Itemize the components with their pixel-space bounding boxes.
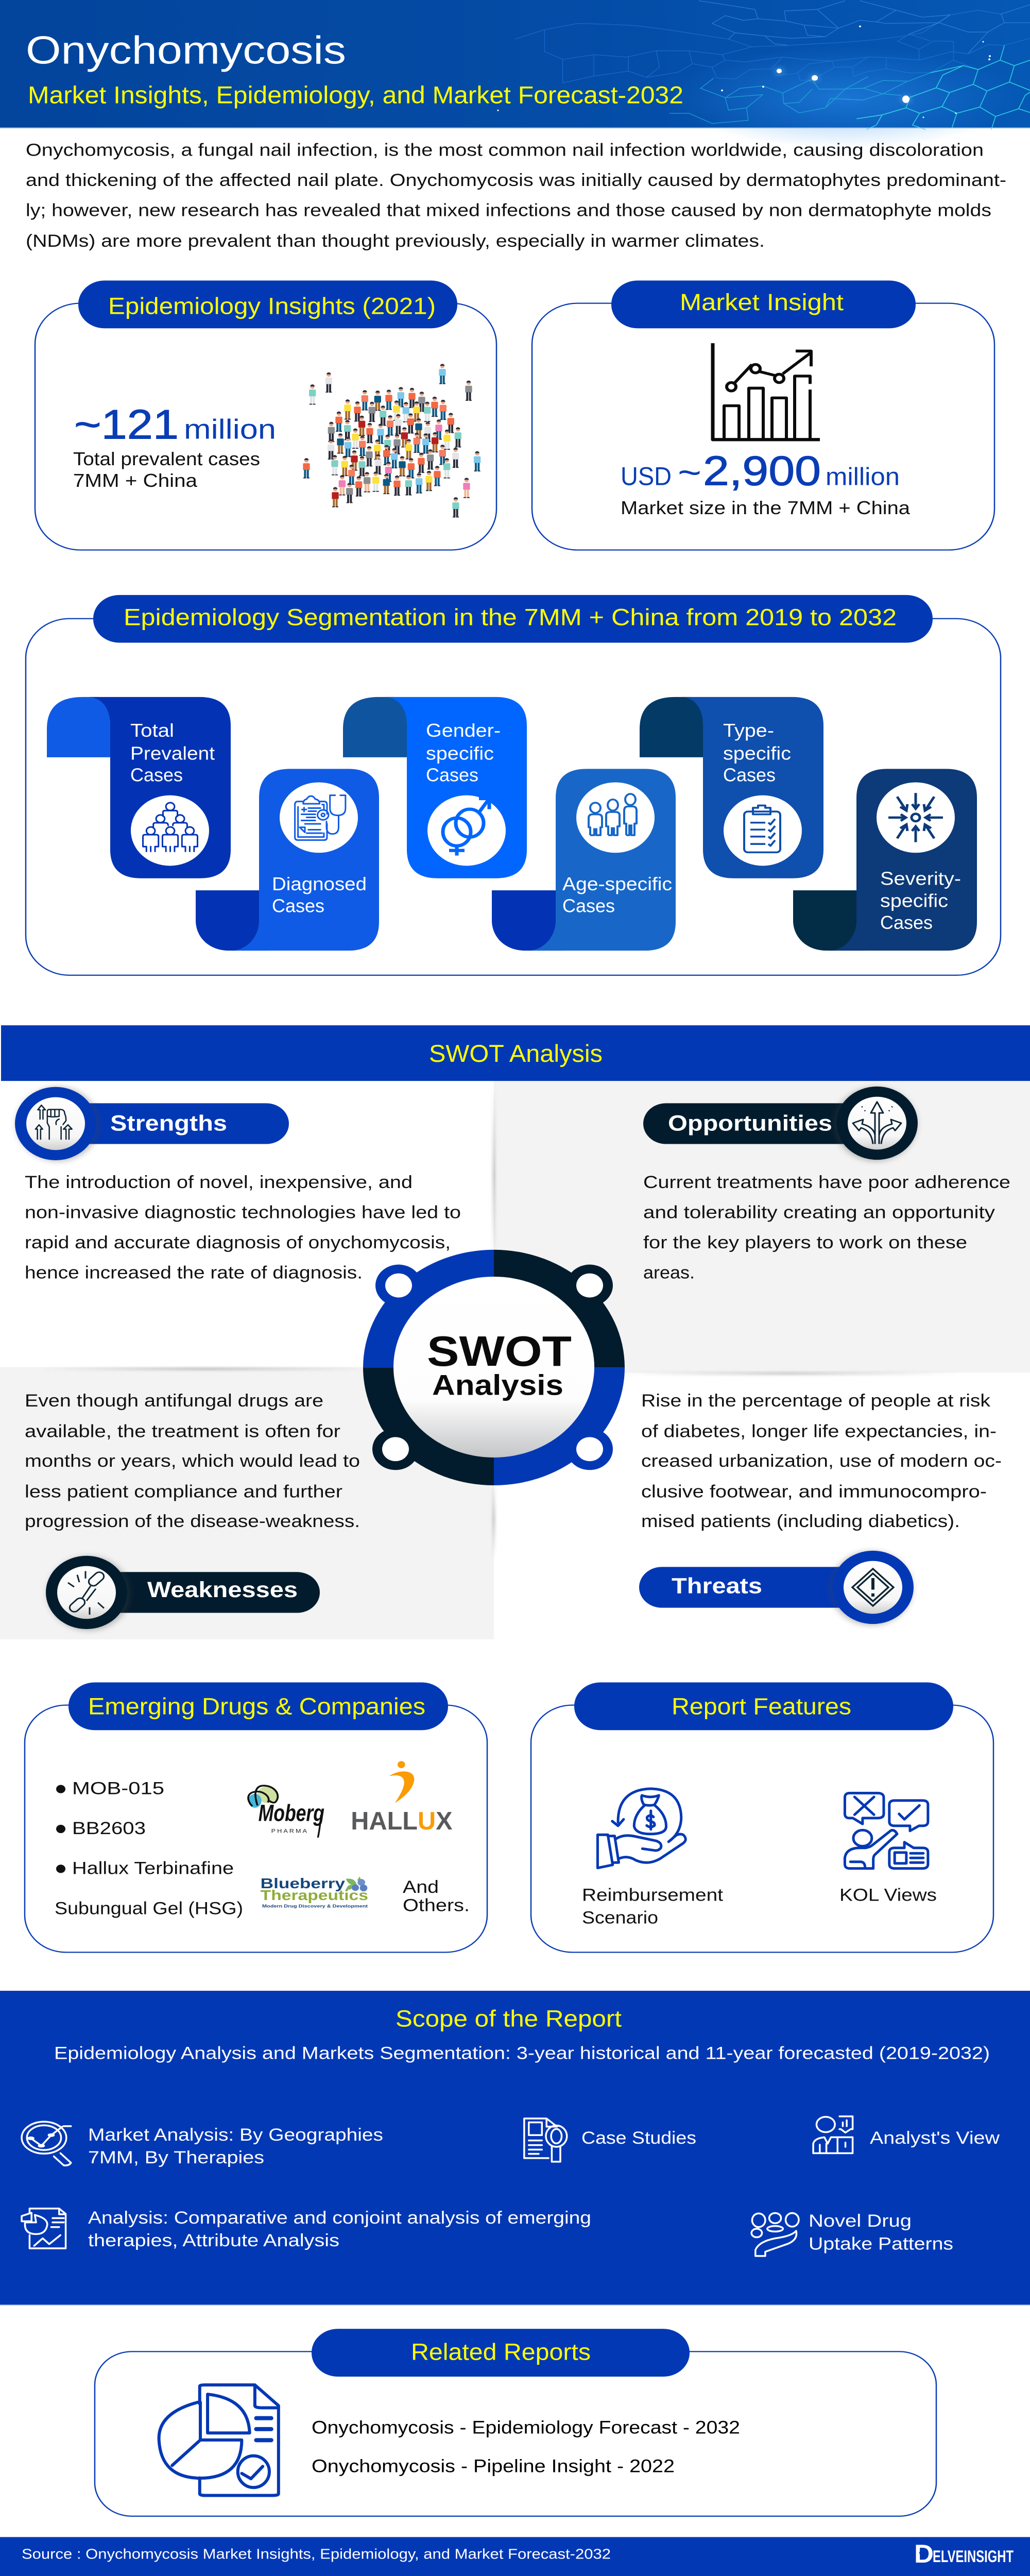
text: weaknesses bbox=[25, 1391, 360, 1531]
heading: report features: Report Features bbox=[672, 1694, 851, 1720]
ribbon: severity-specific cases: Severity- bbox=[880, 869, 961, 889]
text: strengths: hence increased the rate of diagnosis. bbox=[25, 1262, 363, 1282]
ribbon: gender-specific cases: Gender- bbox=[426, 721, 501, 741]
text: weaknesses: progression of the disease-weakness. bbox=[25, 1511, 360, 1531]
intro paragraph: Onychomycosis, a fungal nail infection, is the most common nail infection worldwide, causing discoloration bbox=[26, 140, 984, 160]
logo: DelveInsight bbox=[914, 2539, 1014, 2568]
icon: hand with pills bbox=[751, 2213, 799, 2256]
ribbon: gender-specific cases bbox=[343, 697, 527, 878]
icon: diverging arrows bbox=[853, 1102, 901, 1144]
text: weaknesses: months or years, which would lead to bbox=[25, 1451, 360, 1471]
text: scope summary: Epidemiology Analysis and Markets Segmentation: 3-year historical and 11-year forecasted (2019-2032) bbox=[54, 2043, 990, 2063]
text: threats bbox=[641, 1391, 1002, 1531]
logo: Blueberry Therapeutics: Modern Drug Discovery & Development bbox=[262, 1904, 368, 1908]
footer band bbox=[0, 2537, 1030, 2576]
icon: group of people bbox=[143, 803, 198, 852]
text: feature labels: Scenario bbox=[582, 1907, 658, 1927]
subtitle: Market Insights, Epidemiology, and Market Forecast-2032 bbox=[28, 82, 683, 109]
heading: market insight bbox=[611, 281, 916, 328]
text: strengths bbox=[25, 1172, 461, 1282]
ribbon: severity-specific cases: Cases bbox=[880, 913, 933, 933]
logo: Blueberry Therapeutics: Therapeutics bbox=[261, 1888, 368, 1904]
text: opportunities bbox=[643, 1172, 1010, 1282]
icon: analysis report bbox=[22, 2209, 66, 2248]
list: drugs: Subungual Gel (HSG) bbox=[55, 1898, 243, 1918]
panel: market insight bbox=[532, 281, 994, 550]
logo: Hallux bbox=[351, 1761, 453, 1835]
text: opportunities: areas. bbox=[643, 1262, 695, 1282]
intro paragraph: (NDMs) are more prevalent than thought previously, especially in warmer climates. bbox=[26, 231, 765, 250]
icon: reimbursement hand and money bag bbox=[597, 1789, 685, 1868]
logo: DelveInsight: D bbox=[914, 2539, 934, 2568]
text: novel drug uptake bbox=[809, 2211, 953, 2253]
text: threats: creased urbanization, use of modern oc- bbox=[641, 1451, 1002, 1471]
text: opportunities: and tolerability creating an opportunity bbox=[643, 1202, 995, 1222]
ribbon: type-specific cases: Cases bbox=[723, 765, 776, 786]
ribbon: type-specific cases bbox=[640, 697, 823, 878]
ribbon: diagnosed cases: Diagnosed bbox=[272, 874, 367, 895]
heading: emerging drugs: Emerging Drugs & Companies bbox=[88, 1694, 425, 1720]
logo: Moberg Pharma bbox=[248, 1786, 324, 1838]
text: comparative analysis: therapies, Attribute Analysis bbox=[88, 2230, 339, 2250]
text: strengths: non-invasive diagnostic technologies have led to bbox=[25, 1202, 461, 1222]
text: strengths: The introduction of novel, inexpensive, and bbox=[25, 1172, 413, 1192]
text: threats: clusive footwear, and immunocompro- bbox=[641, 1481, 987, 1501]
stat: market size: million bbox=[826, 462, 900, 490]
logo: Blueberry Therapeutics: Blueberry bbox=[261, 1876, 346, 1891]
icon: growth bar chart bbox=[713, 343, 820, 439]
text: feature labels: Reimbursement bbox=[582, 1885, 723, 1905]
ribbon: severity-specific cases: specific bbox=[880, 891, 948, 911]
heading: related reports bbox=[312, 2329, 690, 2377]
intro paragraph bbox=[26, 140, 1006, 250]
ribbon: type-specific cases: specific bbox=[723, 743, 791, 764]
logo: Blueberry Therapeutics bbox=[261, 1876, 368, 1908]
badge: opportunities: Opportunities bbox=[668, 1112, 832, 1136]
text: market analysis: Market Analysis: By Geographies bbox=[88, 2125, 383, 2144]
text: weaknesses: Even though antifungal drugs are bbox=[25, 1391, 323, 1411]
text: related report titles: Onychomycosis - Pipeline Insight - 2022 bbox=[312, 2455, 675, 2476]
icon: gender symbols bbox=[443, 799, 489, 856]
icon: case studies document bbox=[524, 2119, 567, 2162]
text: comparative analysis: Analysis: Comparative and conjoint analysis of emerging bbox=[88, 2208, 591, 2228]
title: Onychomycosis bbox=[26, 28, 346, 72]
stat: prevalent cases: Total prevalent cases bbox=[73, 449, 260, 469]
stat: prevalent cases: million bbox=[184, 414, 276, 445]
header banner bbox=[0, 0, 1030, 148]
diagram: SWOT central ring: Analysis bbox=[432, 1369, 563, 1401]
badge: strengths: Strengths bbox=[110, 1112, 227, 1136]
stat: market size: USD bbox=[621, 462, 672, 491]
text: analyst view: Analyst's View bbox=[870, 2128, 1000, 2148]
ribbon: total prevalent cases bbox=[47, 697, 231, 878]
icon: KOL views bbox=[845, 1793, 928, 1869]
stat: market size: 2,900 bbox=[703, 448, 821, 494]
badge: threats bbox=[639, 1551, 914, 1625]
logo: Moberg Pharma: PHARMA bbox=[271, 1827, 307, 1834]
text: related report titles bbox=[312, 2417, 740, 2476]
diagram: SWOT central ring bbox=[363, 1250, 625, 1485]
badge: opportunities bbox=[643, 1087, 918, 1161]
text: feature labels: KOL Views bbox=[839, 1885, 937, 1905]
text: and others bbox=[403, 1877, 470, 1915]
icon: clipboard and stethoscope bbox=[295, 795, 346, 840]
icon: crowd of people bbox=[303, 364, 480, 517]
list: drugs: BB2603 bbox=[72, 1818, 146, 1838]
heading: epidemiology insights bbox=[78, 281, 457, 328]
logo: Hallux: HALLUX bbox=[351, 1807, 453, 1835]
text: case studies: Case Studies bbox=[581, 2128, 696, 2148]
ribbon: severity-specific cases bbox=[793, 769, 977, 951]
panel: epidemiology segmentation bbox=[26, 595, 1001, 975]
panel: epidemiology insights bbox=[35, 281, 496, 550]
heading: epidemiology insights: Epidemiology Insights (2021) bbox=[108, 294, 436, 319]
panel: report features bbox=[531, 1683, 993, 1952]
icon: broken chain bbox=[68, 1570, 106, 1615]
text: comparative analysis bbox=[88, 2208, 591, 2250]
badge: weaknesses bbox=[46, 1556, 320, 1631]
stat: prevalent cases bbox=[73, 401, 276, 492]
heading: epidemiology segmentation bbox=[93, 595, 933, 643]
badge: threats: Threats bbox=[672, 1574, 762, 1598]
icon: market analysis magnifier bbox=[22, 2122, 71, 2165]
icon: analyst bbox=[813, 2116, 853, 2153]
heading: SWOT analysis: SWOT Analysis bbox=[429, 1041, 603, 1067]
panel: emerging drugs and companies bbox=[25, 1683, 487, 1952]
list: drugs: MOB-015 bbox=[72, 1778, 164, 1798]
panel: SWOT analysis bbox=[0, 1025, 1030, 1639]
text: opportunities: Current treatments have poor adherence bbox=[643, 1172, 1010, 1192]
text: source: Source : Onychomycosis Market Insights, Epidemiology, and Market Forecast-2032 bbox=[22, 2546, 611, 2562]
ribbon: diagnosed cases: Cases bbox=[272, 896, 324, 917]
badge: weaknesses: Weaknesses bbox=[147, 1578, 298, 1602]
icon: report with pie chart bbox=[159, 2385, 279, 2496]
intro paragraph: and thickening of the affected nail plate. Onychomycosis was initially caused by dermatophytes predominant- bbox=[26, 170, 1006, 190]
icon: checklist clipboard bbox=[744, 805, 780, 852]
text: and others: And bbox=[403, 1877, 439, 1897]
badge: strengths bbox=[15, 1087, 289, 1161]
logo: Moberg Pharma: Moberg bbox=[259, 1801, 324, 1826]
stat: market size: ~ bbox=[678, 452, 701, 494]
icon: arrows converging bbox=[888, 793, 943, 842]
text: threats: mised patients (including diabetics). bbox=[641, 1511, 960, 1531]
ribbon: gender-specific cases: specific bbox=[426, 743, 494, 764]
heading: epidemiology segmentation: Epidemiology Segmentation in the 7MM + China from 2019 to 2032 bbox=[124, 605, 897, 631]
ribbon: diagnosed cases bbox=[196, 769, 379, 951]
heading: market insight: Market Insight bbox=[680, 290, 844, 316]
icon: family of three ages bbox=[589, 794, 637, 835]
text: market analysis: 7MM, By Therapies bbox=[88, 2147, 264, 2167]
stat: market size: Market size in the 7MM + China bbox=[621, 498, 911, 519]
ribbon: gender-specific cases: Cases bbox=[426, 765, 478, 786]
text: novel drug uptake: Novel Drug bbox=[809, 2211, 912, 2231]
stat: prevalent cases: 7MM + China bbox=[73, 471, 198, 492]
ribbon: type-specific cases: Type- bbox=[723, 721, 774, 741]
list: drugs bbox=[55, 1778, 243, 1918]
panel: scope of the report bbox=[0, 1991, 1030, 2306]
text: weaknesses: less patient compliance and further bbox=[25, 1481, 342, 1501]
ribbon: total prevalent cases: Prevalent bbox=[130, 743, 215, 764]
heading: scope of the report: Scope of the Report bbox=[396, 2006, 622, 2032]
heading: SWOT analysis bbox=[1, 1025, 1030, 1081]
text: threats: of diabetes, longer life expectancies, in- bbox=[641, 1421, 997, 1441]
text: weaknesses: available, the treatment is often for bbox=[25, 1421, 340, 1441]
heading: emerging drugs bbox=[68, 1683, 448, 1730]
ribbon: total prevalent cases: Cases bbox=[130, 765, 183, 786]
text: market analysis bbox=[88, 2125, 383, 2167]
diagram: SWOT central ring: SWOT bbox=[427, 1327, 572, 1375]
text: opportunities: for the key players to work on these bbox=[643, 1232, 967, 1252]
text: related report titles: Onychomycosis - Epidemiology Forecast - 2032 bbox=[312, 2417, 740, 2437]
icon: raised fist with arrows bbox=[36, 1105, 72, 1139]
text: novel drug uptake: Uptake Patterns bbox=[809, 2233, 953, 2253]
intro paragraph: ly; however, new research has revealed that mixed infections and those caused by non dermatophyte molds bbox=[26, 200, 991, 220]
heading: report features bbox=[574, 1683, 953, 1730]
stat: market size bbox=[621, 448, 911, 519]
heading: related reports: Related Reports bbox=[411, 2340, 591, 2365]
list: drugs: Hallux Terbinafine bbox=[72, 1858, 234, 1878]
ribbon: age-specific cases bbox=[492, 769, 676, 951]
ribbon: total prevalent cases: Total bbox=[130, 721, 174, 741]
stat: prevalent cases: ~121 bbox=[74, 401, 179, 448]
ribbon: age-specific cases: Cases bbox=[562, 896, 615, 917]
icon: warning diamond bbox=[852, 1569, 894, 1606]
ribbon: age-specific cases: Age-specific bbox=[562, 874, 672, 895]
text: threats: Rise in the percentage of people at risk bbox=[641, 1391, 991, 1411]
panel: related reports bbox=[95, 2329, 936, 2516]
text: and others: Others. bbox=[403, 1895, 470, 1915]
text: feature labels bbox=[582, 1885, 937, 1927]
text: strengths: rapid and accurate diagnosis of onychomycosis, bbox=[25, 1232, 451, 1252]
